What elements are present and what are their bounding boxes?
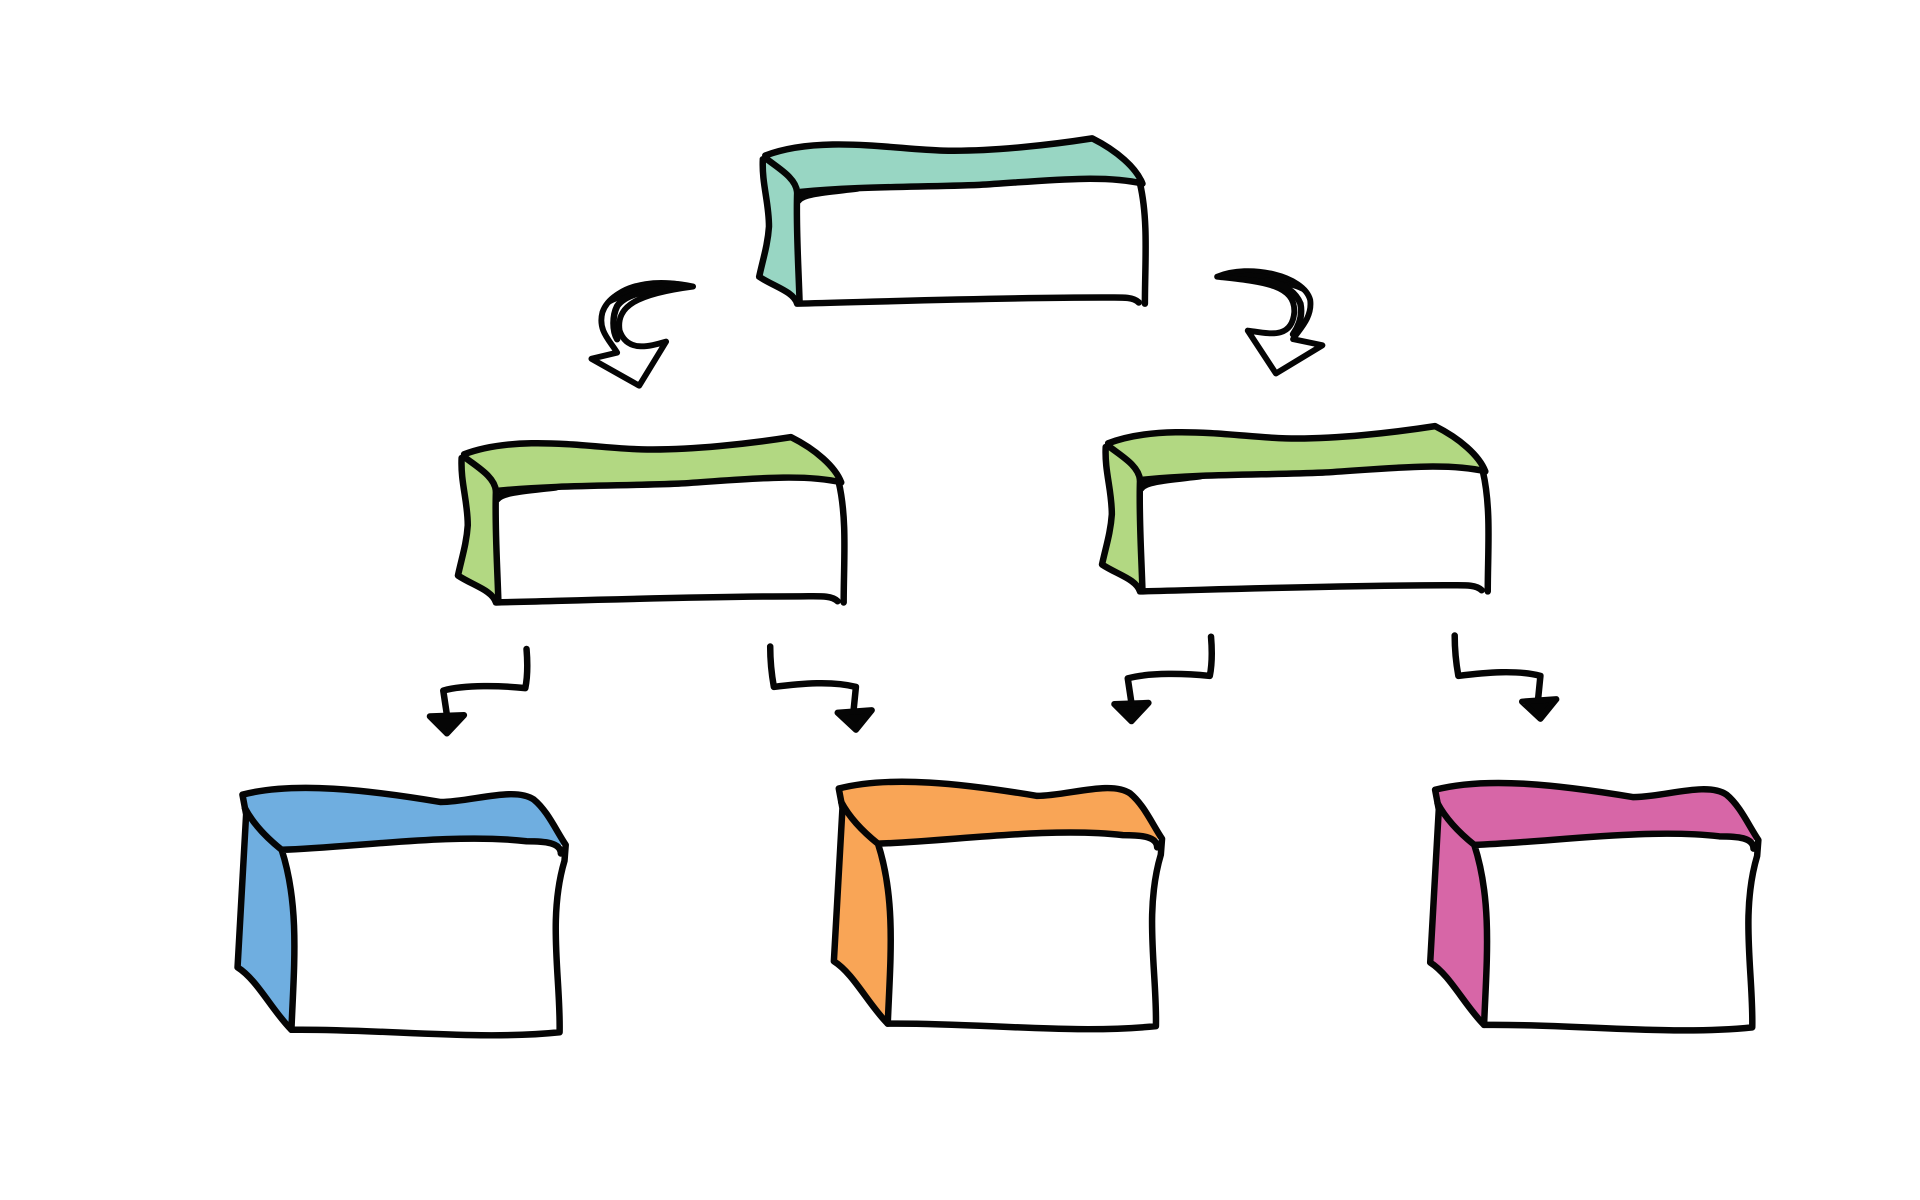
arrow: curved left <box>591 282 693 386</box>
panel: middle left green box <box>458 437 844 602</box>
panel: bottom blue box <box>238 788 566 1035</box>
panel: top teal box <box>759 138 1146 304</box>
arrow: elbow to magenta box <box>1455 636 1556 719</box>
arrow: curved right <box>1217 271 1322 373</box>
panel: middle right green box <box>1102 426 1489 591</box>
panel: bottom magenta box <box>1430 783 1758 1030</box>
arrow: elbow to blue box <box>430 649 527 733</box>
arrow: elbow to orange side from right green box <box>1114 637 1212 721</box>
panel: bottom orange box <box>834 782 1162 1029</box>
arrow: elbow to orange box <box>770 647 872 730</box>
